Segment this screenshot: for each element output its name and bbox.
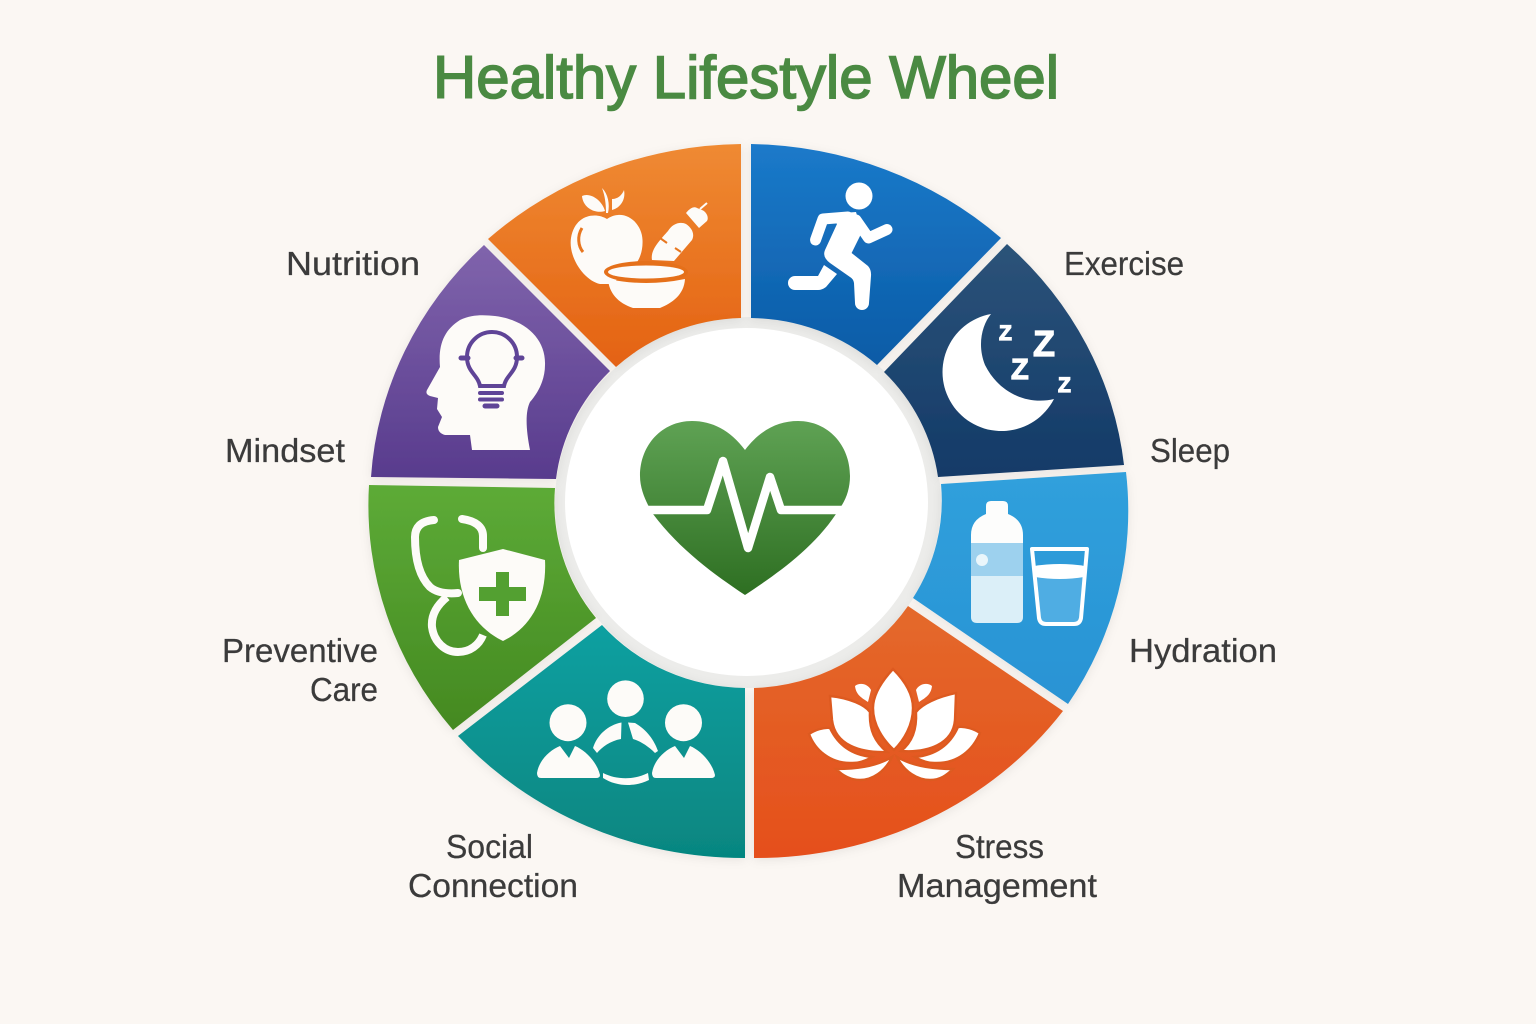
icon: apple, carrot and bowl <box>571 188 708 308</box>
icon: moon and z letters: Z <box>1011 354 1029 386</box>
label: stress management <box>897 828 1097 904</box>
wheel <box>368 144 1128 858</box>
label: hydration: Hydration <box>1129 632 1277 669</box>
segment: exercise <box>751 144 1001 365</box>
center circle <box>565 328 928 676</box>
label: preventive care <box>222 632 378 708</box>
label: nutrition: Nutrition <box>286 245 420 282</box>
label: social connection: Social <box>446 828 533 865</box>
icon: moon and z letters: Z <box>1033 323 1055 364</box>
segment: stress management <box>754 606 1063 858</box>
icon: three people <box>537 680 715 785</box>
label: stress management: Stress <box>955 828 1044 865</box>
label: preventive care: Care <box>310 671 378 708</box>
icon: lotus <box>809 669 980 780</box>
title: Healthy Lifestyle Wheel <box>433 44 1059 111</box>
label: social connection: Connection <box>408 867 578 904</box>
segment: social connection <box>458 625 745 858</box>
icon: moon and z letters <box>943 314 1071 431</box>
segment: nutrition <box>488 144 741 367</box>
segment: preventive care <box>368 485 596 730</box>
label: exercise: Exercise <box>1064 245 1184 282</box>
label: sleep: Sleep <box>1150 432 1230 469</box>
segment: sleep <box>884 244 1124 477</box>
icon: moon and z letters: Z <box>1058 374 1071 397</box>
icon: stethoscope and shield <box>415 519 545 652</box>
center ring <box>555 317 941 688</box>
label: preventive care: Preventive <box>222 632 378 669</box>
segment: hydration <box>913 472 1128 704</box>
label: mindset: Mindset <box>225 432 345 469</box>
icon: head with lightbulb <box>426 315 545 450</box>
label: stress management: Management <box>897 867 1097 904</box>
icon: runner <box>788 182 887 310</box>
label: social connection <box>408 828 578 904</box>
icon: bottle and glass <box>971 501 1087 624</box>
segment: mindset <box>371 245 610 479</box>
icon: heart with pulse <box>640 421 850 595</box>
icon: moon and z letters: Z <box>999 322 1012 345</box>
